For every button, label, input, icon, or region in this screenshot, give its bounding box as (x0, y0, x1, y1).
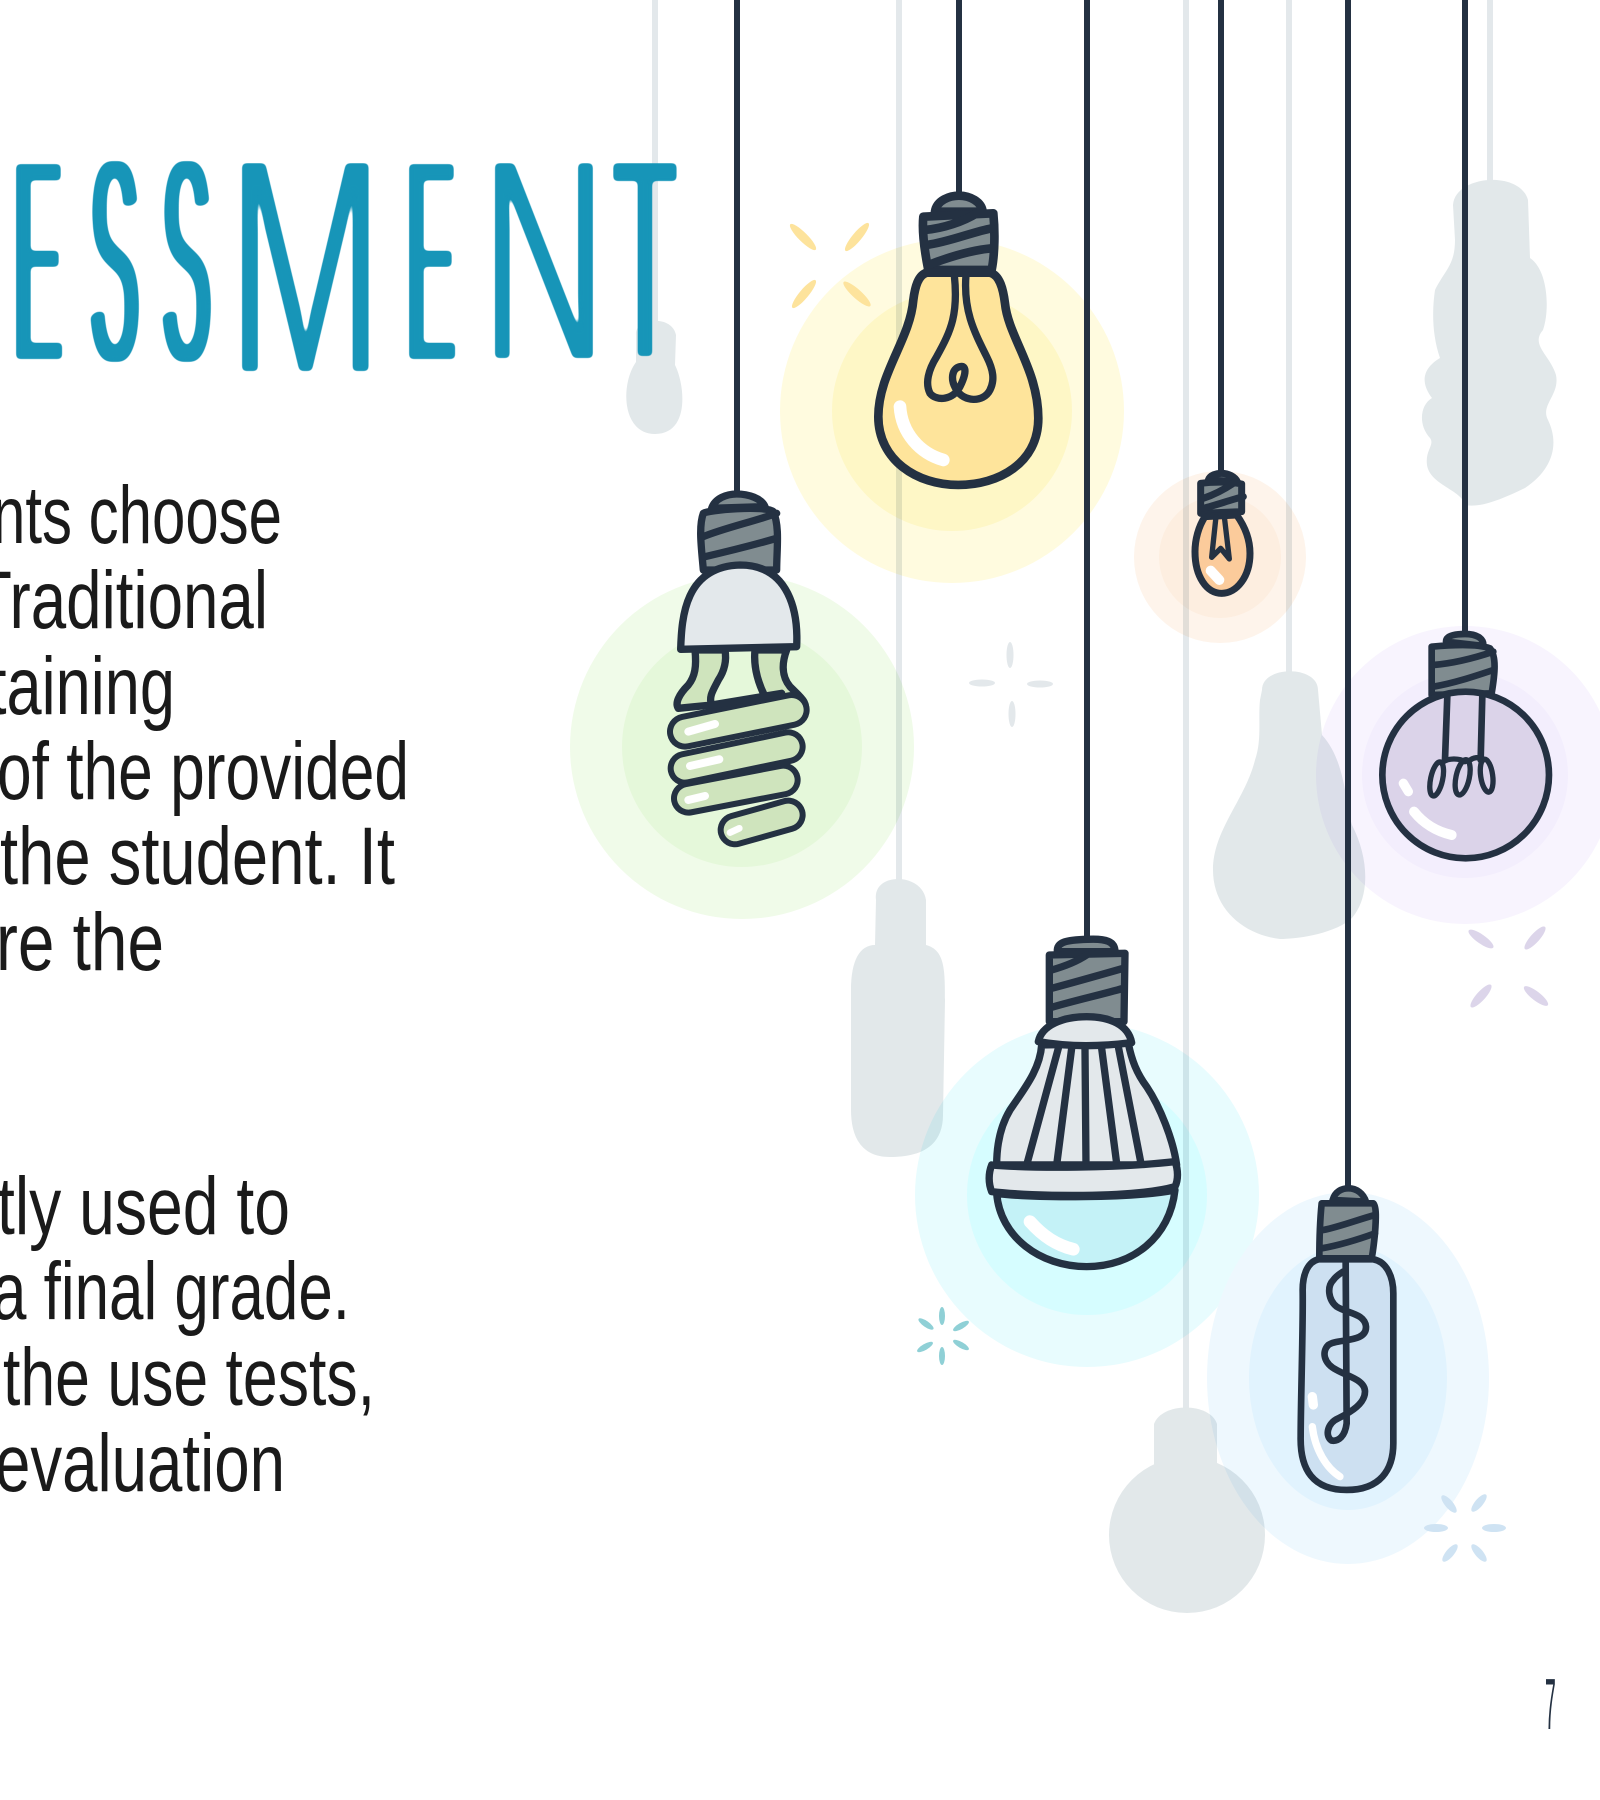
body text: second paragraph: the use tests, (3, 1332, 375, 1423)
bulb: cyan LED (989, 0, 1177, 1267)
title: E (407, 98, 454, 424)
glow: orange bulb (1134, 471, 1306, 643)
title (14, 98, 676, 436)
body text: second paragraph: evaluation (0, 1418, 285, 1509)
icon: grey sparkle (969, 642, 1053, 727)
bulb: blue filament tube (1301, 0, 1393, 1490)
icon: teal sparkle (916, 1307, 970, 1365)
icon: yellow sparkle (787, 220, 873, 311)
title: T (614, 99, 676, 419)
bulb: yellow incandescent (878, 0, 1038, 485)
title: E (14, 98, 61, 424)
icon: purple sparkle (1466, 924, 1551, 1010)
title: M (227, 99, 384, 436)
body text: second paragraph (0, 1161, 375, 1509)
glow: purple bulb (1316, 626, 1600, 924)
glow: blue bulb (1207, 1192, 1489, 1564)
body text: first paragraph (0, 470, 409, 988)
page number: 7 (1545, 1665, 1556, 1745)
bulb: green compact fluorescent (677, 0, 805, 833)
bulb: purple round (1382, 0, 1549, 858)
body text: first paragraph: nts choose (0, 470, 282, 561)
glow: green bulb (570, 575, 914, 919)
silhouette bulbs in the background (626, 0, 1557, 1613)
bulb: orange small (1195, 0, 1250, 593)
body text: second paragraph: a final grade. (0, 1246, 350, 1337)
body text: second paragraph: tly used to (0, 1161, 290, 1252)
body text: first paragraph: of the provided (0, 726, 409, 817)
glow: yellow bulb (780, 239, 1124, 583)
title: N (481, 102, 607, 418)
body text: first paragraph: re the (0, 897, 164, 988)
body text: first paragraph: the student. It (0, 811, 395, 902)
title: S (163, 100, 210, 425)
glow: cyan bulb (915, 1023, 1259, 1367)
icon: light blue sparkle (1424, 1492, 1506, 1564)
title: S (91, 100, 138, 425)
